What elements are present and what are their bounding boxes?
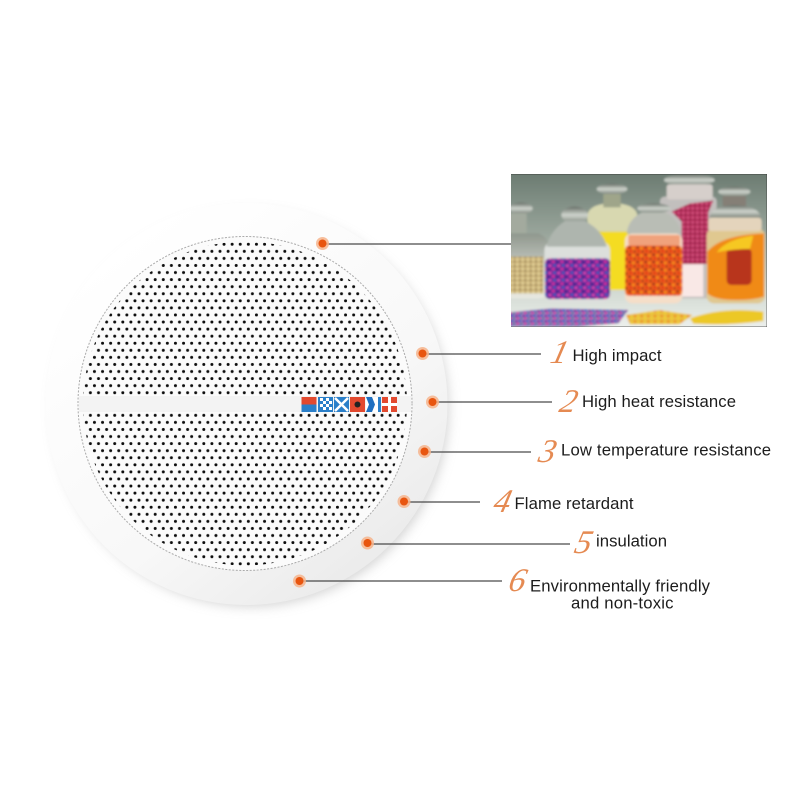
jar pink: [660, 197, 717, 298]
jar red-orange: [625, 233, 682, 303]
callout 1: High impact: High impact: [572, 346, 662, 365]
callout 3: Low temperature resistance: Low temperature resistance: [561, 440, 771, 460]
callout 6: Environmentally friendly and non-toxic: 6: [505, 562, 531, 599]
callout: material photo: [316, 237, 511, 250]
callout 2: High heat resistance: 2: [556, 383, 582, 420]
signal flags logo: [302, 397, 397, 412]
callout 3: Low temperature resistance: [418, 433, 771, 470]
callout 5: insulation: insulation: [596, 532, 667, 550]
speaker grille: [70, 230, 420, 577]
callout 2: High heat resistance: [426, 383, 736, 420]
jar yellow: [587, 203, 637, 232]
callout 6: Environmentally friendly and non-toxic: and non-toxic: [571, 594, 674, 612]
callout 2: High heat resistance: High heat resistance: [582, 392, 736, 411]
callout 1: High impact: [416, 334, 662, 371]
jar orange: [707, 228, 765, 303]
callout 5: insulation: [361, 524, 667, 561]
product photo: plastic granules in jars: [508, 171, 770, 330]
callout 6: Environmentally friendly and non-toxic: [293, 562, 711, 612]
callout 3: Low temperature resistance: 3: [534, 433, 561, 470]
callout 4: Flame retardant: 4: [490, 483, 516, 520]
callout 6: Environmentally friendly and non-toxic: Environmentally friendly: [530, 576, 711, 596]
callout 5: insulation: 5: [571, 524, 597, 561]
speaker shadow: [54, 212, 448, 606]
callout 4: Flame retardant: [398, 483, 634, 520]
speaker outer rim: [46, 203, 448, 605]
speaker: [76, 236, 454, 612]
callout 4: Flame retardant: Flame retardant: [514, 494, 634, 513]
jar purple: [543, 242, 612, 264]
granules on table: [508, 308, 628, 327]
callout 1: High impact: 1: [547, 334, 573, 371]
jar left: [511, 234, 546, 298]
